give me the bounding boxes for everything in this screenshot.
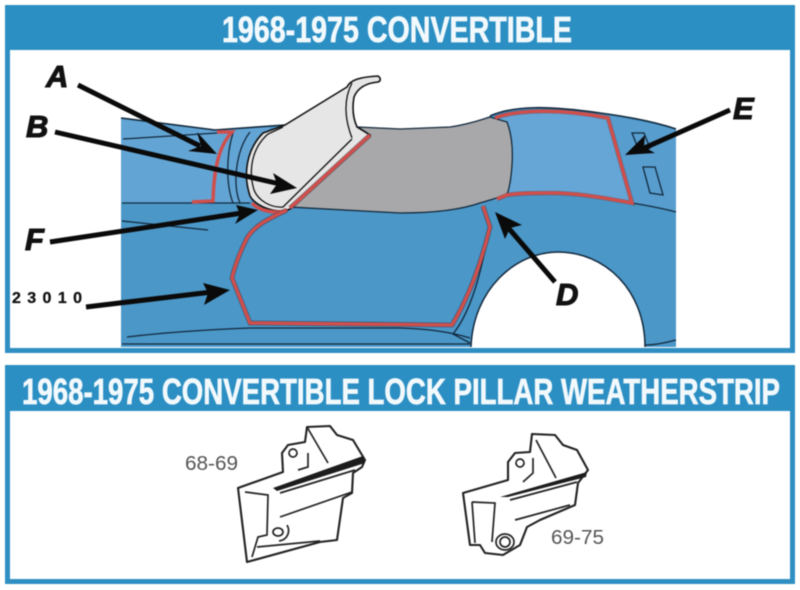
label: 69-75: 69-75 <box>551 527 604 549</box>
weatherstrip F <box>252 203 287 212</box>
label and arrow: A: A <box>45 59 68 94</box>
label and arrow: B <box>26 109 297 194</box>
title: 1968-1975 convertible: 1968-1975 CONVERTIBLE <box>222 9 572 50</box>
body outline <box>121 108 676 130</box>
label and arrow: B: B <box>26 109 48 144</box>
label and arrow: F: F <box>25 222 45 257</box>
body side <box>121 108 676 347</box>
door weatherstrip 23010 <box>232 206 490 325</box>
rear vents <box>632 133 663 195</box>
label and arrow: 23010: 23010 <box>12 290 82 307</box>
part drawing: 69-75 <box>463 434 588 555</box>
heading bar: lock pillar <box>5 365 795 411</box>
upper right panel <box>608 115 676 212</box>
weatherstrip A <box>192 132 232 202</box>
label and arrow: F <box>25 205 258 257</box>
folded top boot <box>246 76 380 211</box>
panel: lock pillar weatherstrip <box>5 365 795 582</box>
part drawing: 68-69 <box>238 426 365 562</box>
car body illustration <box>121 76 676 347</box>
weatherstrip E <box>495 111 632 203</box>
weatherstrip B <box>290 135 370 208</box>
label and arrow: 23010 <box>12 283 230 307</box>
heading bar: convertible <box>5 5 795 50</box>
label and arrow: A <box>45 59 217 154</box>
grey seat area <box>290 117 512 213</box>
body trim lines <box>122 132 676 345</box>
upper body light panel <box>121 118 270 203</box>
panel: convertible diagram <box>5 5 795 350</box>
rear deck light panel <box>495 111 632 203</box>
label and arrow: E: E <box>733 91 755 126</box>
label and arrow: E <box>625 91 755 155</box>
top inner line <box>251 83 352 207</box>
wheel arch <box>471 252 645 347</box>
label and arrow: D: D <box>556 277 578 312</box>
label: 68-69: 68-69 <box>185 453 238 475</box>
label and arrow: D <box>495 212 578 312</box>
